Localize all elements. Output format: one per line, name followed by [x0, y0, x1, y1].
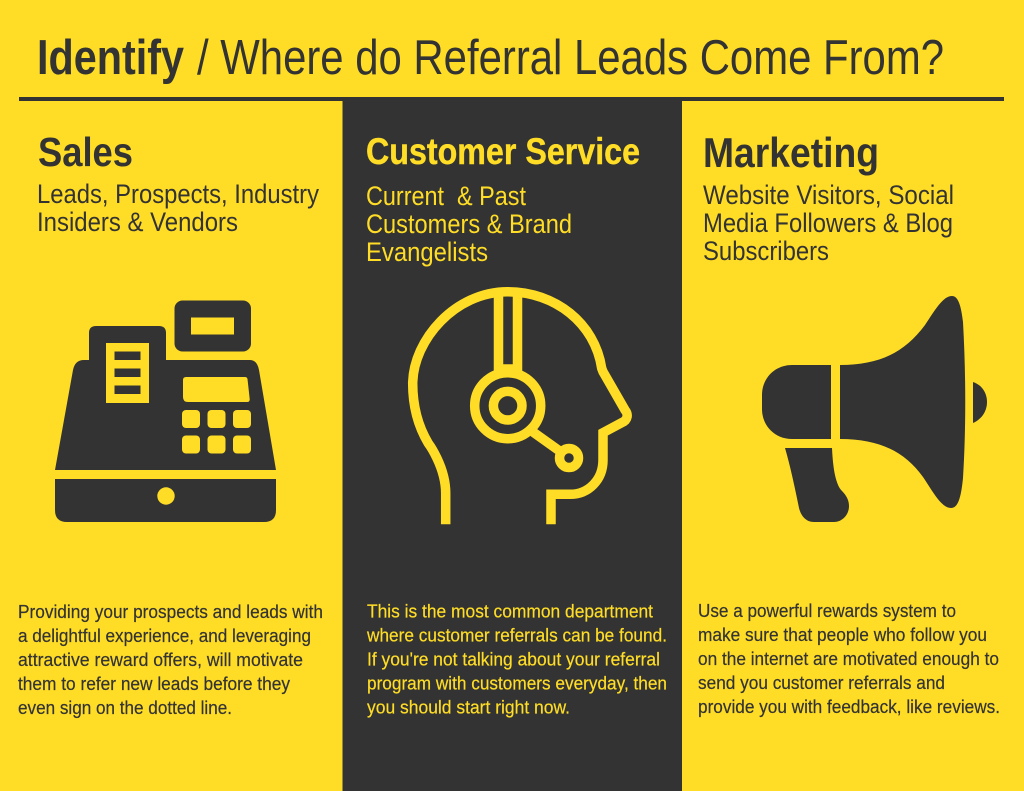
icon: headset head	[413, 292, 627, 524]
customer service description: This is the most common department	[367, 600, 653, 622]
sales audience: Insiders & Vendors	[37, 207, 238, 237]
marketing description: Use a powerful rewards system to	[698, 600, 956, 621]
sales description: attractive reward offers, will motivate	[18, 649, 303, 670]
sales description: them to refer new leads before they	[18, 673, 291, 694]
icon: cash register	[55, 300, 276, 522]
sales description: Providing your prospects and leads with	[18, 601, 323, 622]
customer service description: program with customers everyday, then	[367, 672, 667, 694]
sales description: a delightful experience, and leveraging	[18, 625, 311, 646]
customer service audience: Current & Past	[366, 181, 526, 211]
panel: marketing	[698, 129, 1000, 717]
marketing description	[698, 600, 1000, 717]
panel: customer service	[342, 100, 682, 791]
panel background	[342, 100, 682, 791]
marketing audience: Media Followers & Blog	[703, 208, 953, 238]
marketing description: provide you with feedback, like reviews.	[698, 696, 1000, 717]
customer service description: If you're not talking about your referral	[367, 648, 660, 670]
customer service description: you should start right now.	[367, 696, 570, 718]
icon: megaphone	[762, 296, 987, 522]
customer service audience	[366, 181, 572, 267]
sales description	[18, 601, 323, 718]
heading: marketing: Marketing	[703, 129, 879, 176]
marketing audience: Website Visitors, Social	[703, 180, 954, 210]
customer service description	[366, 600, 667, 718]
marketing description: make sure that people who follow you	[698, 624, 987, 645]
marketing description: send you customer referrals and	[698, 672, 945, 693]
marketing audience	[703, 180, 954, 266]
customer service description: where customer referrals can be found.	[366, 624, 667, 646]
heading: sales: Sales	[38, 129, 133, 175]
panel: sales	[18, 129, 323, 718]
customer service audience: Evangelists	[366, 237, 488, 267]
heading: customer service: Customer Service	[366, 131, 640, 172]
marketing description: on the internet are motivated enough to	[698, 648, 999, 669]
marketing audience: Subscribers	[703, 236, 829, 266]
sales description: even sign on the dotted line.	[18, 697, 232, 718]
sales audience	[37, 179, 319, 237]
title: Identify	[37, 31, 184, 85]
customer service audience: Customers & Brand	[366, 209, 572, 239]
sales audience: Leads, Prospects, Industry	[37, 179, 319, 209]
